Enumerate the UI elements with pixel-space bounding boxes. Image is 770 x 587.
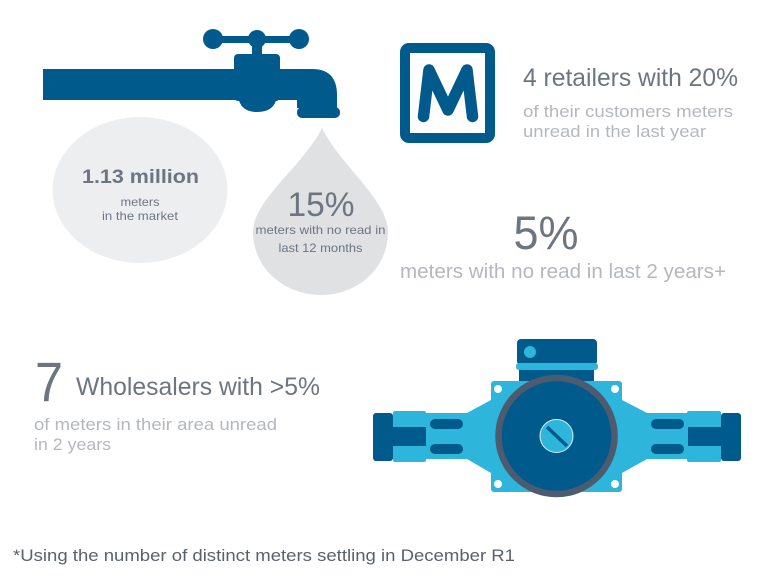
text: wholesaler detail bbox=[34, 415, 277, 454]
icon: retailer M bbox=[405, 48, 490, 138]
stat: 5%: 5% bbox=[514, 206, 578, 259]
text: retailer detail bbox=[523, 102, 733, 141]
label: meters in the market: in the market bbox=[102, 209, 179, 223]
panel: 1.13 million meters bbox=[52, 117, 228, 263]
stat: 1.13 million: 1.13 million bbox=[82, 167, 199, 188]
stat: 7: 7 bbox=[35, 350, 63, 413]
text: wholesaler detail: of meters in their area unread bbox=[34, 415, 277, 434]
text: retailer detail: unread in the last year bbox=[523, 122, 706, 141]
label: meters with no read: meters with no read in bbox=[256, 223, 386, 237]
text: no read in 2 years: meters with no read in last 2 years+ bbox=[400, 261, 726, 283]
stat: 15%: 15% bbox=[288, 186, 354, 224]
heading: 4 retailers: 4 retailers with 20% bbox=[523, 64, 738, 92]
icon: water meter bbox=[373, 339, 741, 494]
icon: faucet bbox=[43, 29, 340, 118]
text: retailer detail: of their customers meters bbox=[523, 102, 733, 121]
label: meters in the market: meters bbox=[120, 195, 160, 209]
text: wholesaler detail: in 2 years bbox=[34, 435, 111, 454]
label: meters with no read: last 12 months bbox=[278, 241, 362, 255]
panel: 15% water drop bbox=[253, 128, 388, 295]
footnote: *Using the number of distinct meters settling in December R1 bbox=[13, 546, 515, 565]
heading: wholesalers: Wholesalers with >5% bbox=[76, 373, 320, 401]
label: meters in the market bbox=[102, 195, 179, 223]
label: meters with no read bbox=[256, 223, 386, 255]
